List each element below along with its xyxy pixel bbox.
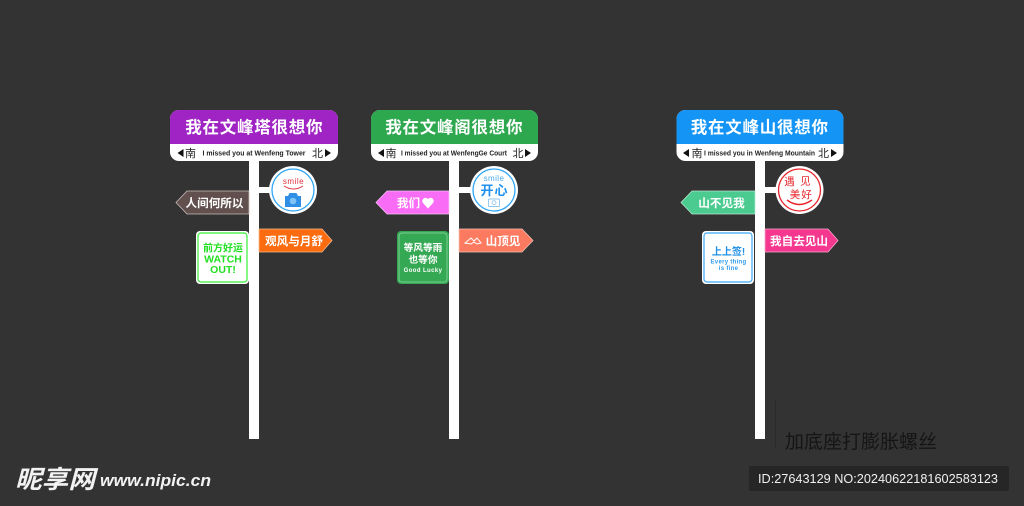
round sign: smile camera: smile (283, 177, 304, 186)
header board: 我在文峰山很想你 (691, 117, 829, 137)
square sign: watch out: OUT! (210, 264, 236, 276)
signpost 2: Wenfeng Court (371, 110, 538, 439)
header board: 北 (818, 147, 829, 160)
round sign: smile happy (470, 166, 518, 214)
signpost 3: Wenfeng Mountain (676, 110, 844, 439)
header board: 我在文峰塔很想你 (185, 117, 323, 137)
square sign: watch out: WATCH (204, 254, 242, 266)
pole (249, 158, 259, 439)
left arrow: 人间何所以: 人间何所以 (186, 196, 244, 210)
square sign: every thing is fine: Every thing (711, 260, 747, 266)
square sign: every thing is fine: 上上签! (712, 245, 745, 258)
connector (765, 187, 777, 193)
right arrow: 山顶见 (459, 229, 533, 252)
square sign: watch out (196, 231, 249, 284)
faint base line (775, 400, 776, 448)
header board: 南 (185, 147, 196, 160)
header board: 北 (312, 147, 323, 160)
header board: 南 (692, 147, 702, 160)
square sign: every thing is fine: is fine (719, 266, 739, 272)
header board (170, 110, 338, 161)
connector (259, 187, 271, 193)
round sign: smile camera (269, 166, 317, 214)
header board: I missed you at Wenfeng Tower (202, 148, 306, 158)
left arrow: 人间何所以 (176, 191, 249, 214)
header board: I missed you at WenfengGe Court (401, 148, 508, 158)
signpost 1: Wenfeng Tower (170, 110, 338, 439)
left arrow: 山不见我: 山不见我 (698, 196, 745, 210)
watermark logo: www.nipic.cn (100, 471, 211, 490)
round sign: smile happy: 开心 (480, 183, 509, 198)
square sign: good lucky: 等风等雨 (404, 241, 443, 254)
pole (449, 158, 459, 439)
right arrow: 观风与月舒 (259, 229, 332, 252)
square sign: good lucky (397, 231, 449, 284)
header board (371, 110, 538, 161)
header board: 南 (386, 147, 396, 160)
right arrow: 观风与月舒: 观风与月舒 (265, 234, 323, 248)
round sign: 遇见美好 stamp: 好 (801, 189, 812, 201)
header board: I missed you in Wenfeng Mountain (704, 148, 815, 158)
header board: 北 (512, 147, 524, 160)
pole (755, 158, 765, 439)
square sign: every thing is fine (702, 231, 754, 284)
right arrow: 我自去见山: 我自去见山 (770, 234, 828, 248)
header board (676, 110, 844, 161)
image id bar (749, 466, 1009, 491)
round sign: 遇见美好 stamp: 见 (800, 176, 811, 188)
right arrow: 我自去见山 (765, 229, 838, 252)
right arrow: 山顶见: 山顶见 (486, 234, 521, 248)
header board: 我在文峰阁很想你 (385, 117, 523, 137)
round sign: 遇见美好 stamp (776, 166, 824, 214)
round sign: smile happy: smile (484, 174, 504, 183)
connector (459, 187, 471, 193)
round sign: 遇见美好 stamp: 美 (790, 188, 801, 201)
left arrow: 我们 heart (376, 191, 449, 214)
square sign: watch out: 前方好运 (203, 242, 243, 254)
installation note: 加底座打膨胀螺丝 (785, 431, 937, 453)
image id bar: ID:27643129 NO:20240622181602583123 (758, 471, 998, 486)
square sign: good lucky: Good Lucky (404, 268, 443, 274)
square sign: good lucky: 也等你 (408, 253, 438, 266)
left arrow: 我们 heart: 我们 (397, 196, 420, 210)
round sign: 遇见美好 stamp: 遇 (784, 176, 795, 188)
watermark logo: 昵享网 (15, 466, 99, 494)
watermark logo (15, 466, 211, 494)
left arrow: 山不见我 (681, 191, 755, 214)
